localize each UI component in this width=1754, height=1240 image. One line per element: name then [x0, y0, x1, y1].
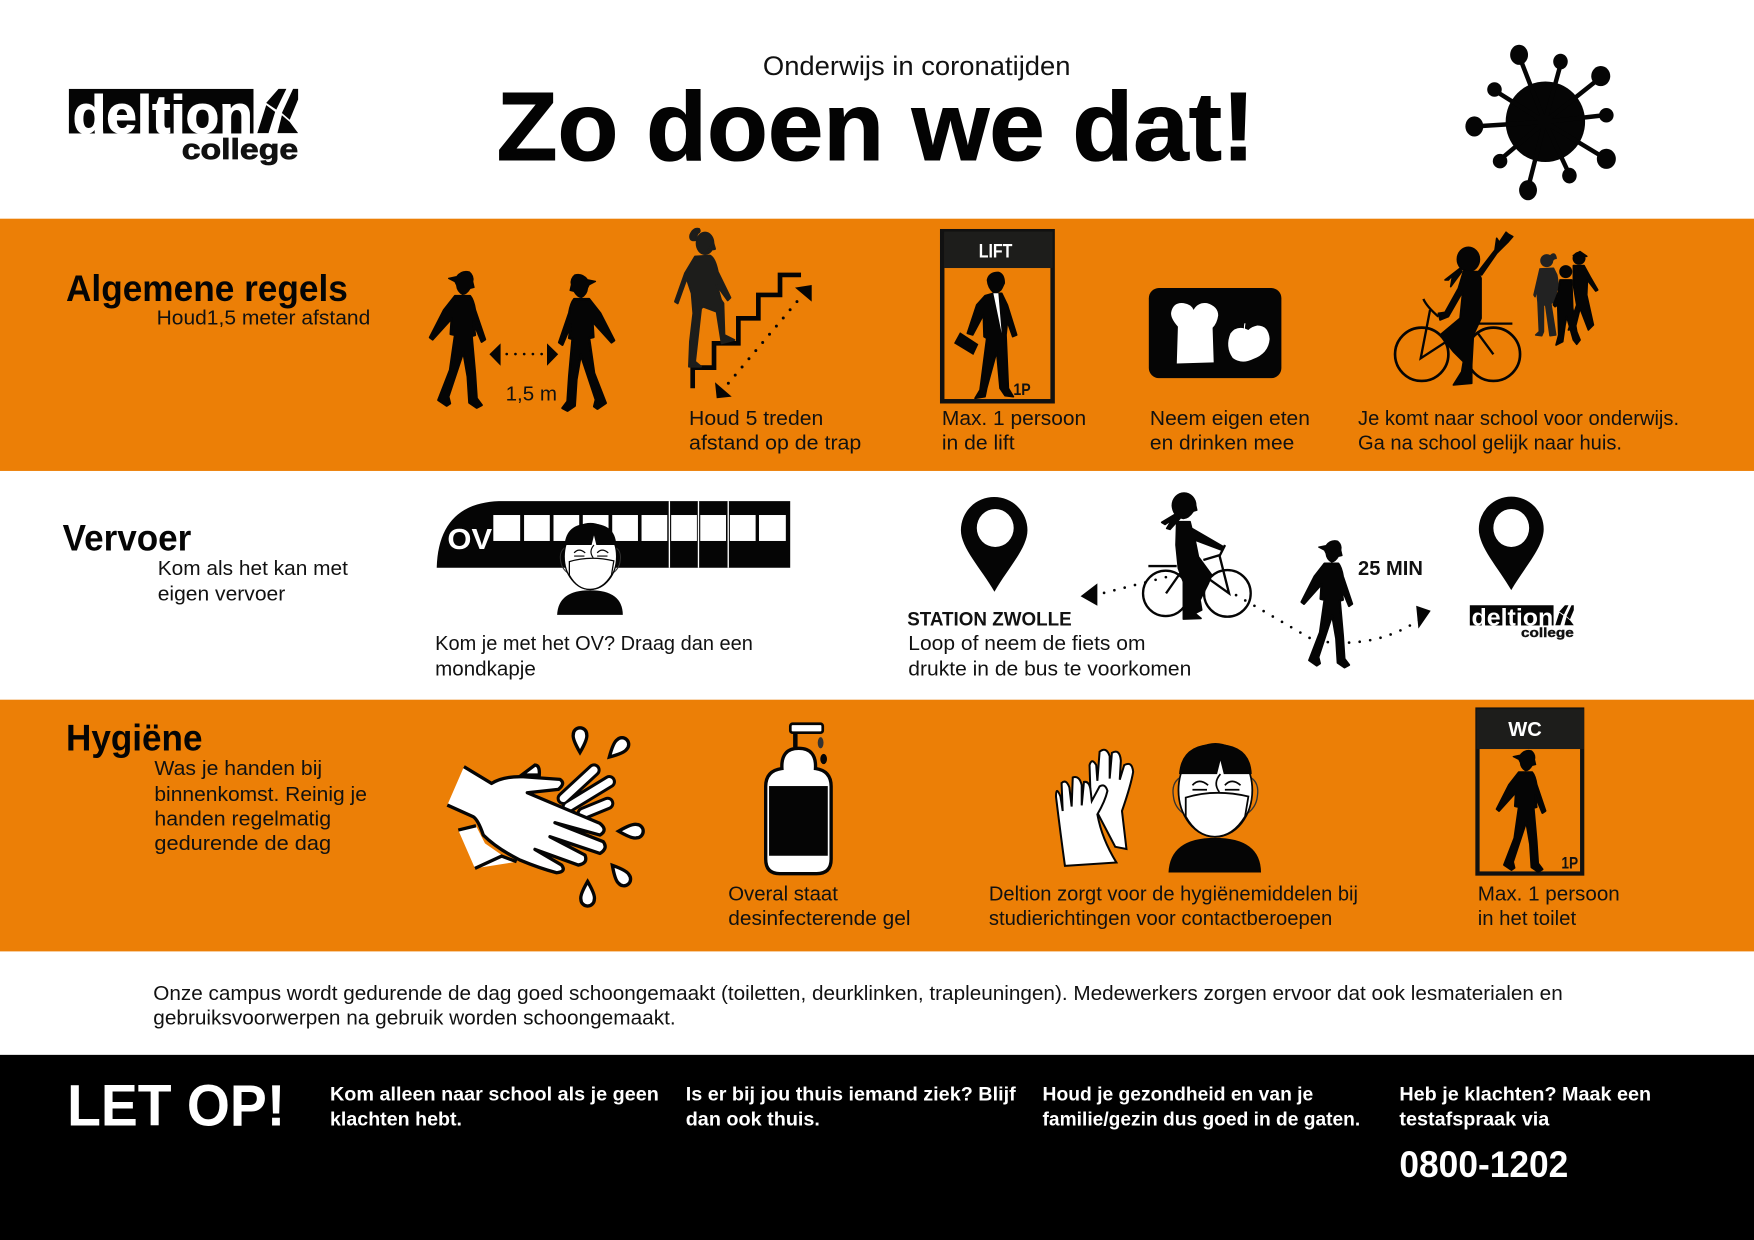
caption: wc: in het toilet — [1478, 907, 1576, 930]
caption: lift: Max. 1 persoon — [942, 407, 1086, 430]
logo small: college — [1521, 625, 1574, 640]
icon: two people at 1.5 m distance: 1,5 m — [506, 382, 557, 405]
text block: cleaning — [153, 982, 1563, 1030]
logo: deltion college — [69, 85, 298, 166]
icon: gloves — [1056, 750, 1133, 866]
icon: wc: WC — [1508, 719, 1542, 741]
caption: school only: Ga na school gelijk naar huis. — [1358, 432, 1622, 455]
intro text: gedurende de dag — [154, 832, 331, 855]
caption: train: mondkapje — [435, 658, 536, 681]
icon: two people at 1.5 m distance — [430, 272, 614, 411]
intro text: eigen vervoer — [158, 583, 285, 606]
panel: algemene regels — [0, 219, 1754, 471]
icon: wc: 1P — [1561, 853, 1578, 872]
icon: virus — [1465, 45, 1616, 200]
panel: hygiene — [0, 700, 1754, 951]
icon: girl on stairs — [675, 229, 812, 398]
caption: hygiene supplies: studierichtingen voor contactberoepen — [989, 907, 1332, 930]
caption: gel: desinfecterende gel — [728, 907, 911, 930]
intro text — [158, 557, 348, 606]
text block: cleaning: gebruiksvoorwerpen na gebruik worden schoongemaakt. — [153, 1007, 676, 1030]
band — [0, 1055, 1754, 1240]
caption: gel — [728, 882, 911, 930]
subtitle: Onderwijs in coronatijden — [763, 51, 1071, 81]
heading: Hygiëne — [66, 718, 202, 759]
notice 1: klachten hebt. — [330, 1108, 462, 1130]
icon: food — [1149, 288, 1281, 378]
icon: walking person — [1302, 541, 1352, 667]
logo small: deltion — [1472, 604, 1553, 631]
intro text: Kom als het kan met — [158, 557, 348, 580]
notice 4 with phone number: testafspraak via — [1399, 1108, 1549, 1130]
notice 4 with phone number: Heb je klachten? Maak een — [1399, 1084, 1651, 1106]
intro text: handen regelmatig — [154, 808, 331, 831]
notice 4 with phone number — [1399, 1084, 1651, 1185]
caption: station: drukte in de bus te voorkomen — [908, 658, 1191, 681]
text block: cleaning: Onze campus wordt gedurende de dag goed schoongemaakt (toiletten, deurklinken, trapleuningen). Medewerkers zorgen ervoor dat ook lesmaterialen en — [153, 982, 1563, 1005]
intro text: Houd1,5 meter afstand — [157, 306, 370, 329]
notice 3: familie/gezin dus goed in de gaten. — [1043, 1108, 1360, 1130]
band — [0, 700, 1754, 951]
notice 2: Is er bij jou thuis iemand ziek? Blijf — [686, 1084, 1016, 1106]
caption: school only: Je komt naar school voor onderwijs. — [1358, 407, 1679, 430]
logo small — [1470, 604, 1574, 640]
caption: hygiene supplies — [989, 882, 1358, 930]
caption: food — [1150, 407, 1310, 455]
caption: school only — [1358, 407, 1679, 455]
icon: train with masked person — [437, 501, 790, 615]
icon: lift: LIFT — [979, 241, 1013, 262]
caption: lift — [942, 407, 1086, 455]
icon: train with masked person: OV — [447, 524, 493, 556]
band — [0, 219, 1754, 471]
notice 1: Kom alleen naar school als je geen — [330, 1084, 659, 1106]
intro text: binnenkomst. Reinig je — [154, 783, 367, 806]
icon: map pin school — [1479, 497, 1544, 590]
heading: LET OP! — [67, 1073, 285, 1138]
icon: lift: 1P — [1013, 380, 1031, 399]
caption: station — [907, 609, 1191, 681]
icon: gel bottle — [766, 724, 831, 874]
caption: stairs — [689, 407, 861, 455]
title: Zo doen we dat! — [497, 72, 1255, 181]
caption: station: STATION ZWOLLE — [907, 609, 1072, 630]
intro text: Was je handen bij — [154, 757, 322, 780]
icon: masked face — [1169, 744, 1261, 873]
notice 2 — [686, 1084, 1016, 1130]
notice 3: Houd je gezondheid en van je — [1043, 1084, 1313, 1106]
caption: food: en drinken mee — [1150, 432, 1294, 455]
icon: cyclist — [1143, 493, 1251, 619]
icon: washing hands — [447, 728, 643, 906]
icon: wc — [1477, 709, 1584, 874]
caption: lift: in de lift — [942, 432, 1015, 455]
caption: stairs: afstand op de trap — [689, 432, 861, 455]
icon: girl with bicycle and group — [1395, 232, 1598, 385]
caption: stairs: Houd 5 treden — [689, 407, 823, 430]
route arrows — [1081, 575, 1431, 643]
caption: hygiene supplies: Deltion zorgt voor de hygiënemiddelen bij — [989, 882, 1358, 905]
caption: wc — [1478, 882, 1620, 930]
notice 3 — [1043, 1084, 1360, 1130]
logo: deltion college: deltion — [73, 85, 253, 145]
caption: train — [435, 632, 753, 681]
notice 2: dan ook thuis. — [686, 1108, 820, 1130]
caption: train: Kom je met het OV? Draag dan een — [435, 632, 753, 655]
panel: let op — [0, 1055, 1754, 1240]
header — [69, 45, 1616, 200]
panel: vervoer — [63, 493, 1574, 681]
icon: lift — [942, 231, 1053, 401]
caption: gel: Overal staat — [728, 882, 838, 905]
heading: Algemene regels — [66, 268, 348, 309]
heading: Vervoer — [63, 517, 191, 558]
caption: food: Neem eigen eten — [1150, 407, 1310, 430]
logo: deltion college: college — [182, 134, 298, 166]
label: 25 min: 25 MIN — [1358, 558, 1423, 580]
caption: station: Loop of neem de fiets om — [908, 632, 1145, 655]
notice 1 — [330, 1084, 659, 1130]
notice 4 with phone number: 0800-1202 — [1399, 1144, 1568, 1185]
icon: map pin station — [961, 497, 1027, 592]
caption: wc: Max. 1 persoon — [1478, 882, 1620, 905]
intro text — [154, 757, 367, 855]
